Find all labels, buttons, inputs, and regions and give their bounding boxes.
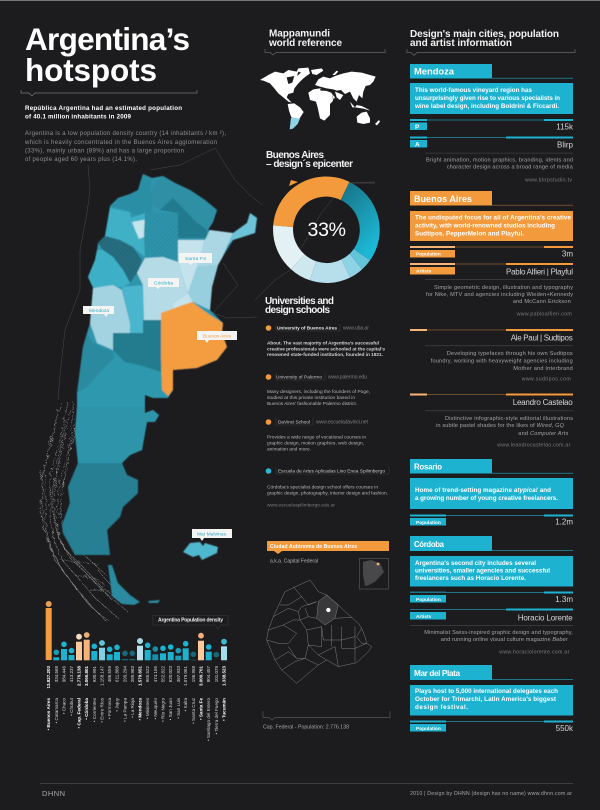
school: Escuela Spilimbergo: Escuela de Artes Aplicadas Lino Enea Spilimbergo [278,468,385,474]
heading: main cities [410,29,559,49]
description box: wine label design, including Boldrini & Ficcardi. [414,103,559,110]
artist: Pablo Alfieri: Artists [416,268,432,274]
population values: 1.158.147 [100,666,104,686]
population values: 620.023 [168,666,173,682]
intro text [24,131,226,163]
heading: Universities: Universities and [265,296,334,307]
panel: Mendoza [410,64,574,184]
description box [410,83,573,114]
heading: Mappamundi: Mappamundi [269,28,330,40]
artist: Leandro Castelao: www.leandrocastelao.com.ar [497,442,571,448]
province names: • Chaco [62,698,66,714]
bars [46,601,227,660]
school: University of Buenos Aires: renowned state-funded institution, founded in 1821. [267,352,383,358]
subtitle [25,105,182,120]
school: University of Palermo: studied at this private institution based in [267,395,355,401]
school: University of Palermo: Many designers, including the founders of Poge, [267,389,370,395]
artist row: A [415,141,420,148]
provinces [62,174,257,605]
school: University of Buenos Aires: University of Buenos Aires [277,326,337,332]
panel: Cordoba [410,536,573,656]
description box [410,211,573,241]
school: University of Buenos Aires: www.uba.ar [343,326,369,332]
province names: • Tierra del Fuego [214,698,219,734]
teal segment [341,182,380,260]
tab [410,191,573,206]
school: University of Palermo [266,373,370,407]
population bracket [263,711,390,720]
artist: Pablo Alfieri: for Nike, MTV and agencies including Wieden+Kennedy [426,292,573,298]
province: La Rioja [98,236,142,283]
province: Corrientes [197,230,233,267]
population row: Population [416,726,441,732]
population values: 930.991 [92,666,97,682]
panel: Rosario [410,459,573,526]
school: University of Buenos Aires: creative professionals were schooled at the capital's [267,346,385,352]
population values: 367.933 [176,666,181,682]
school: Escuela Spilimbergo [266,467,389,508]
artist: Pablo Alfieri: and McCann Erickson [513,299,571,305]
population row: 1.3m [555,595,573,604]
city subtitle: a.k.a. Capital Federal [270,558,318,564]
heading: Universities [265,296,334,316]
label: Cordoba [148,278,179,289]
legend: Argentina Population density [153,616,228,629]
population row [410,514,573,526]
description box: a growing number of young creative freelancers. [415,495,558,502]
artist: Leandro Castelao [410,394,573,448]
description box: Argentina's second city includes several [415,560,536,567]
tab [410,536,573,551]
population values: 1.338.523 [222,666,226,686]
population row: Population [416,520,441,526]
population values: 1.579.651 [138,666,142,686]
artist: Pablo Alfieri: Simple geometric design, illustration and typography [434,285,573,291]
intro text: of people aged 60 years plus (14.1%). [25,157,137,163]
label: Santa Fe: Santa Fe [185,256,206,262]
panel: Buenos Aires [410,191,573,448]
population values [46,666,227,689]
province names: • Córdoba [84,698,89,720]
population values: 804.457 [206,666,211,682]
province: Neuquen [77,333,115,393]
population row: Population [416,597,441,603]
artist: Leandro Castelao: Distinctive infographic-style editorial illustrations [445,416,573,422]
province: Cordoba [137,257,188,320]
orange 33% segment [273,176,349,227]
heading: Universities: design schools [265,305,330,316]
province names: • Neuquén [153,698,158,720]
school: University of Palermo: University of Palermo [276,374,322,380]
title: Argentina’s [25,21,190,57]
description box: October for Trimarchi, Latin America's biggest [415,696,557,703]
province names: • Santa Cruz [191,697,196,724]
description box: Sudtipos, PepperMelon and Playful. [415,230,524,238]
tab: Buenos Aires [414,194,472,204]
label: Buenos Aires [197,331,237,343]
population values: 334.568 [54,666,59,682]
title: hotspots [25,52,157,88]
rule: Mappamundi [265,49,385,55]
province names: • Misiones [145,697,150,719]
artist: Horacio Lorente: Artists [416,614,432,620]
description box [410,556,573,586]
province: Salta / Jujuy [110,174,153,217]
school: University of Buenos Aires [266,324,385,358]
province names: • Mendoza [138,698,142,721]
inset locator map [360,558,388,589]
artist row [410,136,574,150]
tab [410,459,573,474]
population caption: Cap. Federal - Population: 2.776.138 [263,724,349,730]
tab: Córdoba [414,540,445,549]
intro text: (33%), mainly urban (89%) and has a large proportion [25,148,184,154]
population values: 413.237 [69,666,74,682]
province: Mendoza [90,285,130,350]
light segments [350,249,370,270]
population values: 101.079 [214,666,219,682]
population row [410,592,573,604]
city banner: Ciudad Autónoma de Buenos Aires [270,544,357,550]
province names: • Chubut [69,697,74,716]
population values: 3.000.701 [198,666,204,686]
province names: • Buenos Aires [46,698,51,730]
artist: Horacio Lorente: www.horaciolorente.com.ar [499,650,570,656]
artist: Pablo Alfieri: www.pabloalfieri.com [517,312,572,318]
artist description: www.blirpstudio.tv [525,178,572,184]
heading: Buenos Aires epicenter [266,150,353,170]
population row: 3m [562,250,573,258]
province names: • Corrientes [92,697,97,722]
province names: • San Luis [176,697,181,719]
province names: • Santiago del Estero [206,698,211,741]
population density chart [46,601,228,741]
population row [410,119,574,132]
school: DaVinci School [266,418,369,452]
population row: 1.2m [555,518,573,526]
school: Escuela Spilimbergo: www.escuelaspilimbergo.edu.ar [267,502,335,508]
heading: Buenos Aires epicenter: Buenos Aires [266,150,324,161]
logo: DHNN: DHNN [42,789,65,798]
title [25,21,190,88]
intro text: which is heavily concentrated in the Buenos Aires agglomeration [24,140,217,146]
subtitle: of 40.1 million inhabitants in 2009 [25,114,132,120]
description box: The undisputed focus for all of Argentina's creative [415,214,571,222]
artist: Ale Paul: Mother and Interbrand [513,366,573,372]
province: Buenos Aires [161,302,227,396]
map of Argentina [40,174,257,622]
population values: 552.822 [160,666,166,682]
province: Chubut [75,407,159,463]
population values: 289.983 [130,666,135,682]
population values: 474.155 [153,666,158,682]
province: Rio Negro [77,357,168,407]
city banner [267,541,389,554]
province names: • Entre Ríos [100,697,104,723]
population values: 965.522 [145,666,150,682]
legend: Argentina Population density: Argentina Population density [158,618,223,624]
province names: • Cap. Federal [76,698,82,728]
province names: • Santa Fe [198,698,204,720]
school: DaVinci School: graphic design, motion graphics, web design, [267,440,364,446]
school: University of Palermo: www.palermo.edu [328,374,367,380]
islands: Malvinas [183,542,218,560]
tab: Rosario [414,462,442,472]
description box: design festival. [415,704,468,711]
panel: Mar del Plata [410,665,574,733]
province names: • La Rioja [130,698,135,718]
artist: Leandro Castelao: Leandro Castelao [513,398,573,407]
province: Tucuman [132,219,148,239]
province names: • Formosa [107,698,112,719]
population values: 299.294 [122,666,128,682]
intro text: Argentina is a low population density country (14 inhabitants / km ²), [25,131,226,137]
province: Entre Rios [188,265,218,310]
province names: • Tucumán [222,698,226,721]
artist: Pablo Alfieri [410,263,573,318]
artist: Ale Paul: foundry, working with heavyweight agencies including [431,358,573,364]
artist: Horacio Lorente: Horacio Lorente [518,614,573,622]
school: DaVinci School: www.escueladavinci.net [316,420,369,426]
tab: Mendoza [414,66,455,76]
artist description: Bright animation, motion graphics, branding, idents and [426,158,573,164]
label: Santa Fe [179,253,212,265]
school: Escuela Spilimbergo: graphic design, photography, interior design and fashion. [267,490,388,496]
artist: Pablo Alfieri: Pablo Alfieri | Playful [506,268,573,276]
description box: Home of trend-setting magazine atypica! and [415,487,551,494]
description box [410,478,573,509]
population row: Population [416,252,441,258]
school: University of Palermo: Buenos Aires' fashionable Palermo district. [267,401,357,407]
neighbouring country borders [58,148,375,400]
artist description [425,153,574,184]
artist: Ale Paul: www.sudtipos.com [522,376,571,382]
province: Santa Fe [170,240,205,320]
province names: • La Pampa [122,698,128,722]
artist: Ale Paul [410,329,573,382]
heading: Mappamundi: world reference [268,38,342,49]
province: Santiago del Estero [144,213,178,260]
population values: 1.079.051 [183,666,188,686]
label: Cordoba: Córdoba [154,280,173,286]
population values: 486.559 [107,666,112,682]
province names: • Salta [183,698,188,711]
population row [410,246,573,258]
description box: unsurprisingly given rise to various specialists in [415,95,560,102]
artist: Ale Paul: Developing typefaces through his own Sudtipos [447,351,573,357]
school: DaVinci School: Provides a wide range of vocational courses in [267,434,366,440]
heading: main cities: Design's main cities, population [410,29,559,40]
title rule [21,90,197,96]
artist: Horacio Lorente [410,608,573,656]
school: DaVinci School: animation and more. [267,446,311,452]
artist description: character design across a broad range of media [447,164,574,170]
population row: 550k [556,724,574,733]
tab [410,64,573,79]
country silhouette [62,174,257,555]
donut chart [273,176,380,283]
description box [410,685,573,716]
province names: • San Juan [168,698,173,720]
description box: activity, with world-renowned studios including [415,222,555,230]
school: Escuela Spilimbergo: Córdoba's specialist design school offers courses in [267,484,378,490]
population values: 13.827.203 [46,666,51,689]
description box: freelancers such as Horacio Lorente. [415,575,526,582]
school: DaVinci School: DaVinci School [278,420,310,426]
description box: This world-famous vineyard region has [415,87,532,94]
rule: main cities [407,49,575,56]
tab: Mar del Plata [414,669,460,678]
population values: 2.776.138 [76,666,82,686]
artist: Leandro Castelao: in subtle pastel shades for the likes of Wired, GQ [436,423,565,429]
artist row: Blirp [557,140,574,150]
label: Buenos Aires: Buenos Aires [203,334,232,340]
province: Salta south [105,208,145,257]
population values: 196.958 [191,666,196,682]
artist: Horacio Lorente: Minimalist Swiss-inspired graphic design and typography, [424,630,573,636]
province: Santa Cruz [62,463,138,555]
school: University of Buenos Aires: About. The vast majority of Argentina's successful [267,340,379,346]
panel: Ciudad Autonoma de Buenos Aires [263,541,390,730]
description box: universities, smaller agencies and successful [415,568,550,574]
province names: • Catamarca [54,698,59,723]
label: Mar Malvinas: Mar Malvinas [197,532,227,538]
province: Misiones [228,213,257,245]
value 33%: 33% [308,219,346,241]
subtitle: República Argentina had an estimated population [25,105,182,112]
population row: P [415,124,420,131]
artist: Ale Paul: Ale Paul | Sudtipos [511,334,573,342]
province: Chaco [160,198,207,238]
province names [46,697,227,741]
heading: Mappamundi [268,28,342,49]
province: La Pampa [113,320,161,372]
population values: 611.888 [114,666,120,682]
province names: • Río Negro [160,698,166,722]
province: San Juan [88,250,130,287]
city district map [267,580,372,683]
footer credit: 2010 | Design by DHNN (design has no name) www.dhnn.com.ar [410,791,572,797]
province: Formosa [150,176,217,238]
world map [260,68,380,129]
label: Mendoza: Mendoza [89,308,109,314]
tab [410,665,573,680]
description box: Plays host to 5,000 international delegates each [415,688,558,695]
province: San Luis [122,285,144,333]
chile fjords [40,403,128,622]
label: Mendoza [83,306,114,317]
heading: main cities: and artist information [410,38,512,49]
province names: • Jujuy [114,697,120,712]
province: Tierra del Fuego [108,565,140,605]
population values: 984.446 [62,666,66,682]
population row [410,720,574,733]
artist: Horacio Lorente: and running online visual culture magazine Beber [441,637,569,643]
label: Mar Malvinas [192,529,232,541]
artist: Leandro Castelao: and Computer Arts [518,431,569,437]
heading: Buenos Aires epicenter: – design´s epicenter [266,159,353,170]
population row: 115k [556,122,574,132]
population values: 3.066.801 [84,666,89,686]
